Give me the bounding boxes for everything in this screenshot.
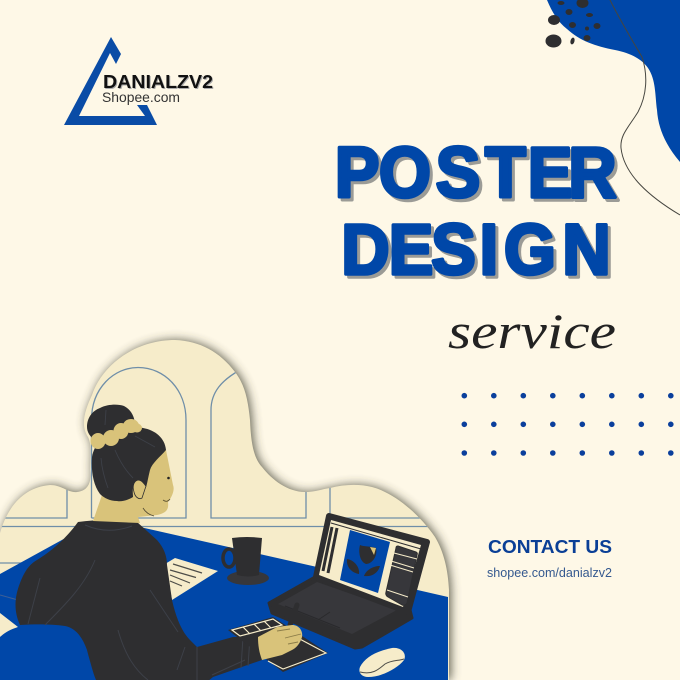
stylus bbox=[290, 605, 297, 625]
scrunchie bbox=[90, 419, 142, 449]
illustration: designer at desk bbox=[0, 330, 460, 680]
screen side panel bbox=[386, 546, 417, 605]
desk line bbox=[0, 595, 18, 600]
hair strands bbox=[101, 410, 155, 488]
title line 2: DESIGN bbox=[341, 210, 611, 289]
windows bbox=[0, 368, 440, 563]
laptop base bbox=[269, 577, 412, 648]
subtitle: service: service bbox=[448, 303, 616, 359]
screen toolbar bbox=[323, 527, 337, 573]
logo triangle bbox=[64, 37, 157, 125]
hand bbox=[258, 625, 302, 660]
logo name: DANIALZV2 bbox=[103, 72, 213, 92]
laptop bbox=[269, 516, 427, 648]
eye bbox=[167, 477, 170, 479]
title line 1: POSTER bbox=[335, 133, 617, 212]
scene shadow bbox=[2, 340, 451, 680]
contact heading: CONTACT US bbox=[488, 537, 612, 557]
desk bbox=[0, 527, 448, 680]
logo bbox=[64, 37, 213, 125]
hair bun bbox=[87, 405, 135, 440]
laptop screen bbox=[319, 520, 421, 607]
dot grid bbox=[462, 393, 674, 456]
blob: top right corner bbox=[546, 0, 680, 215]
sweater folds bbox=[28, 525, 250, 680]
jaw line bbox=[143, 508, 154, 516]
chair bbox=[0, 625, 96, 680]
laptop lid bbox=[316, 516, 427, 612]
logo subtitle: Shopee.com bbox=[102, 89, 180, 105]
mouse bbox=[359, 648, 405, 677]
neck and face bbox=[93, 450, 174, 523]
sweater bbox=[16, 520, 262, 680]
wall bbox=[0, 330, 460, 680]
hair bbox=[87, 405, 166, 501]
paper bbox=[165, 558, 218, 600]
mouth bbox=[163, 499, 170, 501]
mug and saucer bbox=[223, 537, 269, 585]
contact url: shopee.com/danialzv2 bbox=[487, 566, 612, 580]
cream wedge bbox=[0, 613, 18, 637]
screen artwork bbox=[340, 530, 390, 593]
ear bbox=[133, 479, 146, 499]
title bbox=[335, 133, 617, 289]
drawing tablet bbox=[228, 617, 328, 672]
